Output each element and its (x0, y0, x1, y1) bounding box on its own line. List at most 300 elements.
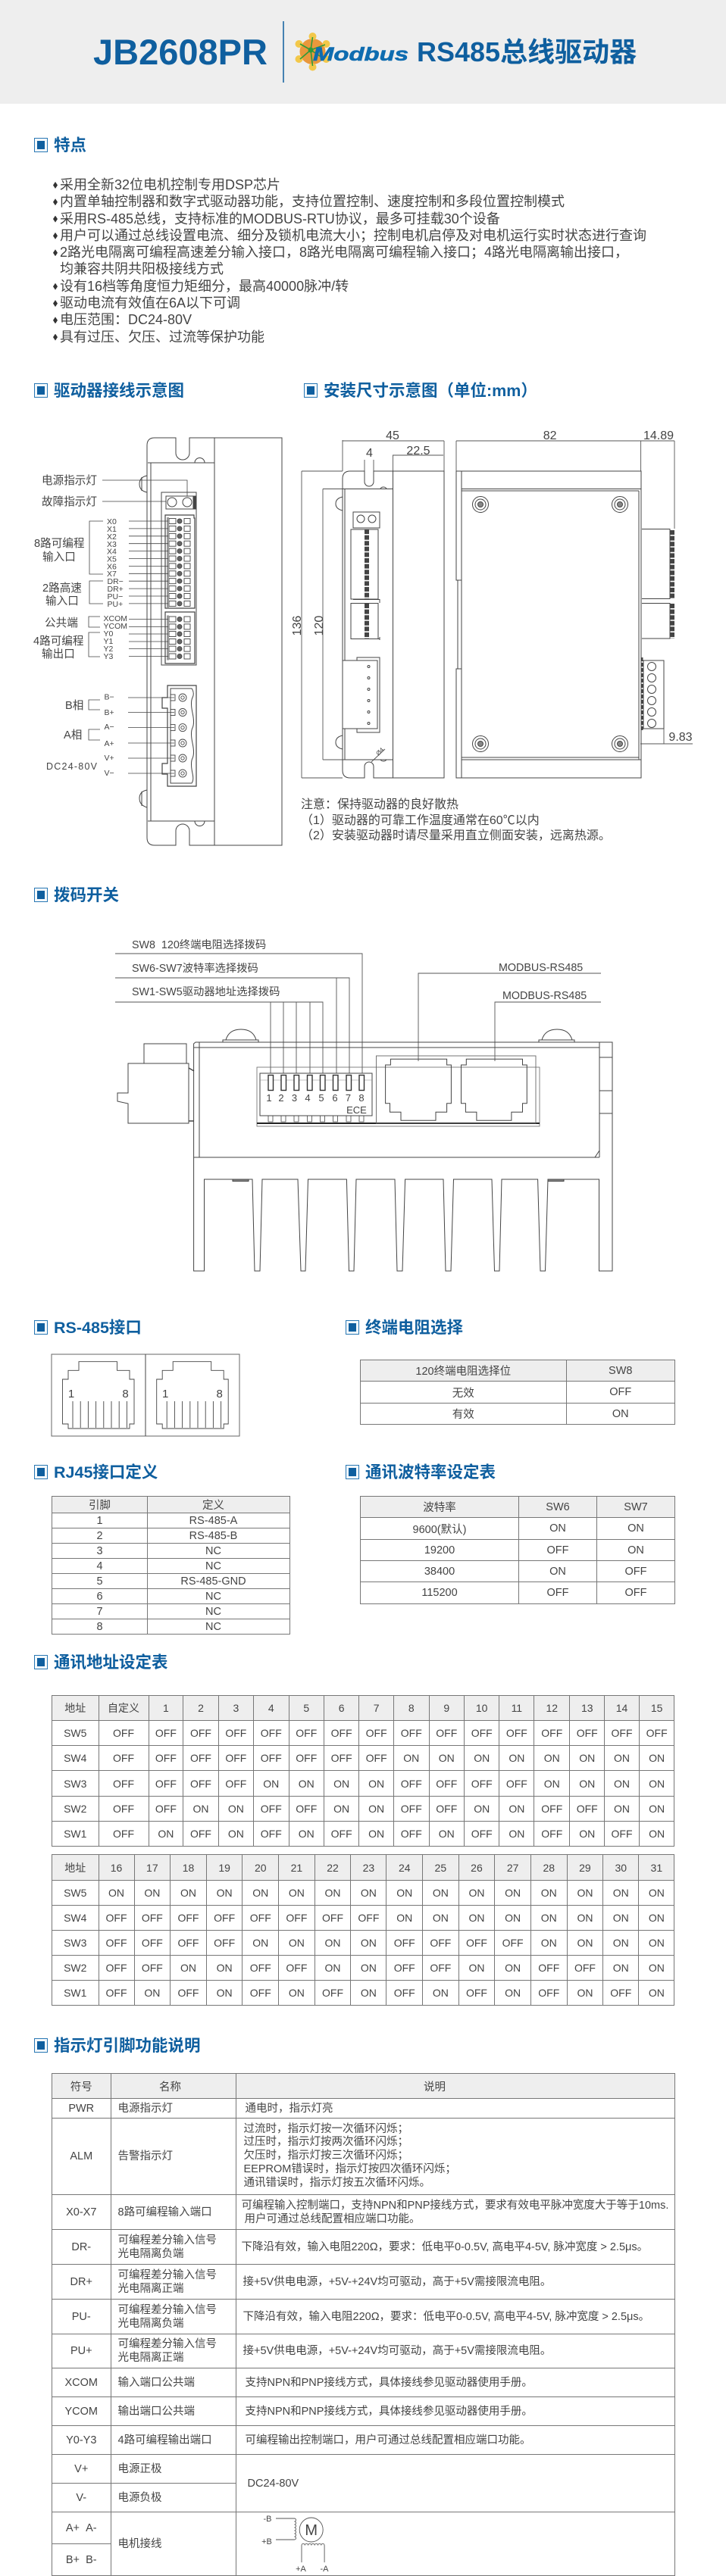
table: address 1-15: ON (403, 1752, 419, 1764)
table: indicator and pin functions: 下降沿有效，输入电阻220Ω，要求：低电平0-0.5V, 高电平4-5V, 脉冲宽度 > 2.5μs。 (241, 2240, 648, 2253)
table: address 16-31: OFF (250, 1912, 271, 1924)
right port (157, 1362, 228, 1429)
table: address 1-15: OFF (506, 1727, 527, 1739)
table: indicator and pin functions: 通电时，指示灯亮 (246, 2103, 333, 2115)
table: address 16-31: OFF (394, 1937, 415, 1949)
table: address 16-31: ON (325, 1937, 341, 1949)
table: address 16-31: ON (289, 1987, 305, 1999)
table: indicator and pin functions: 过流时，指示灯按一次循环闪烁； (244, 2123, 408, 2135)
table: indicator and pin functions: 支持NPN和PNP接线方式，具体接线参见驱动器使用手册。 (246, 2377, 533, 2389)
table: address 16-31: ON (541, 1937, 557, 1949)
table: address 1-15: OFF (113, 1727, 134, 1739)
wiring diagram (33, 438, 282, 845)
table: address 16-31: ON (613, 1887, 629, 1899)
table: address 1-15: OFF (225, 1777, 246, 1789)
table: indicator and pin functions: ALM (70, 2150, 92, 2162)
table: address 1-15: ON (614, 1777, 630, 1789)
table: indicator and pin functions: XCOM (65, 2377, 98, 2389)
table: address 16-31: OFF (538, 1962, 559, 1974)
table: baud rate: ON (549, 1565, 566, 1577)
table: address 1-15: OFF (155, 1727, 177, 1739)
table: address 1-15: ON (228, 1803, 244, 1815)
feature list: 驱动电流有效值在6A以下可调 (60, 295, 240, 311)
table: indicator and pin functions: PWR (68, 2103, 94, 2115)
table: address 1-15: ON (614, 1752, 630, 1764)
table: indicator and pin functions: 电机接线 (118, 2537, 162, 2549)
table: address 16-31: OFF (106, 1912, 127, 1924)
wiring group labels: 故障指示灯 (42, 495, 97, 508)
installation notes: （2）安装驱动器时请尽量采用直立侧面安装，远离热源。 (301, 829, 611, 842)
table: indicator and pin functions: V- (76, 2492, 86, 2504)
dimension values: 22.5 (406, 445, 430, 457)
heading: termination resistor: 终端电阻选择 (365, 1319, 463, 1337)
table: indicator and pin functions: X0-X7 (66, 2206, 96, 2218)
wiring group labels: 4路可编程 (33, 635, 84, 648)
dimension values: 45 (386, 429, 399, 442)
table: indicator and pin functions: 电源负极 (118, 2492, 162, 2504)
heading: features (34, 136, 86, 155)
table: address 16-31: 25 (435, 1862, 446, 1874)
table: address 1-15: ON (579, 1752, 595, 1764)
table: indicator and pin functions: B+ B- (66, 2554, 97, 2566)
table: address 1-15: OFF (155, 1752, 177, 1764)
table: address 16-31: OFF (142, 1937, 163, 1949)
table: RJ45 pins: 5 (96, 1575, 103, 1588)
table: baud rate: 波特率 (423, 1502, 456, 1514)
terminal pin labels: A− (105, 723, 114, 732)
table: indicator and pin functions: 可编程输出控制端口，用户可通过总线配置相应端口功能。 (246, 2434, 530, 2446)
table: address 16-31: OFF (214, 1912, 235, 1924)
table: address 1-15: ON (509, 1752, 524, 1764)
terminal pin labels: X2 (107, 532, 117, 542)
terminal pin labels: X6 (107, 562, 117, 571)
table: address 1-15: ON (368, 1777, 384, 1789)
table: address 1-15: ON (299, 1828, 314, 1840)
table: address 1-15: OFF (506, 1777, 527, 1789)
table: address 1-15: ON (579, 1828, 595, 1840)
table: indicator and pin functions: 光电隔离正端 (118, 2352, 183, 2364)
table: baud rate: SW7 (624, 1501, 648, 1513)
table: address 1-15: 15 (651, 1702, 662, 1714)
table: indicator and pin functions: PU+ (70, 2345, 92, 2357)
table: address 16-31: ON (505, 1987, 521, 1999)
table: address 16-31: SW3 (64, 1937, 86, 1949)
table: indicator and pin functions: 可编程输入控制端口，支持NPN和PNP接线方式，要求有效电平脉冲宽度大于等于10ms. (241, 2200, 668, 2212)
dimension values: 82 (543, 429, 557, 442)
table: address 16-31: ON (144, 1987, 160, 1999)
feature list: 电压范围：DC24-80V (60, 312, 192, 327)
table: address 1-15: ON (192, 1803, 208, 1815)
table: indicator and pin functions: 用户可通过总线配置相应端口功能。 (245, 2213, 421, 2225)
table: address 1-15: 1 (163, 1702, 169, 1714)
terminal pin labels: PU+ (108, 600, 123, 609)
table: baud rate (360, 1496, 675, 1604)
terminal pin labels: X3 (107, 540, 117, 549)
dimension values: 136 (291, 616, 304, 635)
table: RJ45 pins: RS-485-B (189, 1530, 237, 1542)
feature list: 采用RS-485总线，支持标准的MODBUS-RTU协议，最多可挂载30个设备 (60, 211, 500, 226)
heading: wiring diagram: 驱动器接线示意图 (54, 382, 184, 400)
table: address 1-15: OFF (296, 1727, 317, 1739)
table: baud rate: ON (627, 1522, 644, 1535)
table: address 16-31: OFF (430, 1937, 451, 1949)
feature list: 用户可以通过总线设置电流、细分及锁机电流大小；控制电机启停及对电机运行实时状态进行查询 (60, 228, 646, 243)
table: address 16-31: ON (217, 1962, 233, 1974)
table: address 1-15: OFF (401, 1803, 422, 1815)
right port: 8 (217, 1388, 223, 1400)
table: termination resistor: SW8 (609, 1365, 632, 1377)
table: address 1-15: OFF (577, 1727, 598, 1739)
table: indicator and pin functions: 说明 (424, 2081, 446, 2094)
table: address 16-31: 24 (399, 1862, 411, 1874)
table: address 16-31: OFF (394, 1987, 415, 1999)
RS-485 connector drawing (52, 1354, 239, 1436)
table: indicator and pin functions: 过压时，指示灯按两次循环闪烁； (244, 2136, 408, 2148)
table: address 16-31: OFF (322, 1987, 343, 1999)
table: address 1-15: 7 (374, 1702, 380, 1714)
installation notes: 注意：保持驱动器的良好散热 (301, 798, 458, 811)
table: indicator and pin functions: 可编程差分输入信号 (118, 2338, 217, 2350)
table: indicator and pin functions: 下降沿有效，输入电阻220Ω，要求：低电平0-0.5V, 高电平4-5V, 脉冲宽度 > 2.5μs。 (243, 2310, 649, 2322)
table: address 16-31: OFF (142, 1912, 163, 1924)
table: baud rate: OFF (624, 1587, 647, 1599)
table: address 1-15: OFF (331, 1727, 352, 1739)
table: address 1-15: 12 (546, 1702, 558, 1714)
table: address 16-31: 19 (218, 1862, 230, 1874)
dimension values (291, 429, 693, 757)
table: address 16-31: OFF (610, 1987, 631, 1999)
table: address 16-31: OFF (214, 1937, 235, 1949)
table: address 16-31: ON (217, 1987, 233, 1999)
table: address 16-31: 22 (327, 1862, 339, 1874)
table: RJ45 pins: NC (205, 1606, 221, 1618)
dimension values: 9.83 (668, 731, 693, 744)
table: address 16-31: ON (180, 1962, 196, 1974)
table: address 16-31: 26 (471, 1862, 483, 1874)
table: address 1-15: OFF (366, 1752, 387, 1764)
table: address 1-15: OFF (471, 1777, 493, 1789)
table: indicator and pin functions: 支持NPN和PNP接线方式，具体接线参见驱动器使用手册。 (246, 2406, 533, 2418)
table: RJ45 pins: 定义 (202, 1500, 224, 1512)
table: address 16-31: OFF (106, 1937, 127, 1949)
table: address 16-31: OFF (250, 1987, 271, 1999)
table: address 1-15: OFF (401, 1828, 422, 1840)
table: address 16-31: 28 (543, 1862, 555, 1874)
table: address 1-15: ON (263, 1777, 279, 1789)
terminal pin labels: V+ (105, 754, 114, 763)
table: indicator and pin functions: 8路可编程输入端口 (118, 2206, 212, 2218)
table: address 16-31: OFF (538, 1987, 559, 1999)
table: address 1-15: SW2 (64, 1803, 86, 1815)
table: indicator and pin functions: DR+ (70, 2275, 92, 2287)
table: address 16-31: ON (433, 1887, 449, 1899)
DIP switch block (257, 1067, 540, 1126)
terminal pin labels: X0 (107, 517, 117, 526)
table: baud rate: ON (549, 1522, 566, 1535)
table: address 1-15: ON (228, 1828, 244, 1840)
table: address 16-31: OFF (286, 1962, 307, 1974)
terminal pin labels: DR+ (108, 585, 124, 594)
table: address 16-31: ON (577, 1937, 593, 1949)
table: address 16-31: 20 (255, 1862, 267, 1874)
wiring group labels: 电源指示灯 (42, 474, 97, 487)
icon: stepper motor wiring: -B (264, 2515, 271, 2524)
table: indicator and pin functions: V+ (74, 2463, 88, 2475)
side view (456, 471, 672, 778)
feature list: 采用全新32位电机控制专用DSP芯片 (60, 177, 280, 192)
modbus RJ ports (376, 1056, 536, 1123)
heading: RJ45 definition: RJ45接口定义 (54, 1463, 158, 1482)
table: address 1-15: ON (368, 1803, 384, 1815)
table: address 1-15: OFF (113, 1803, 134, 1815)
table: indicator and pin functions: 光电隔离正端 (118, 2283, 183, 2295)
table: address 16-31: ON (433, 1912, 449, 1924)
terminal pin labels: X1 (107, 525, 117, 534)
table: address 1-15: ON (439, 1752, 455, 1764)
installation dimension drawings (291, 429, 693, 779)
terminal pin labels: B+ (105, 708, 114, 717)
table: address 1-15: OFF (296, 1803, 317, 1815)
table: address 1-15: 4 (268, 1702, 274, 1714)
table: address 16-31: ON (252, 1937, 268, 1949)
terminal pin labels: B− (105, 692, 114, 701)
table: address 1-15: ON (544, 1752, 560, 1764)
installation notes (301, 798, 611, 842)
switch numbers: ECE (346, 1104, 367, 1116)
side connector (117, 1044, 194, 1123)
table: address 16-31: ON (649, 1987, 665, 1999)
wiring group labels: 输入口 (45, 595, 79, 607)
table: address 16-31: OFF (502, 1937, 524, 1949)
DIP switch diagram (115, 938, 612, 1271)
table: address 16-31: SW4 (64, 1912, 86, 1924)
table: address 1-15: OFF (190, 1727, 211, 1739)
table: address 1-15: OFF (401, 1727, 422, 1739)
table: indicator and pin functions: 符号 (70, 2081, 92, 2094)
dimension values: 4 (366, 447, 373, 460)
table: address 1-15: OFF (296, 1752, 317, 1764)
table: indicator and pin functions: 告警指示灯 (118, 2150, 173, 2162)
table: address 16-31: ON (577, 1987, 593, 1999)
table: address 1-15: OFF (646, 1727, 668, 1739)
wiring group labels: 公共端 (45, 617, 78, 629)
table: address 16-31: ON (649, 1962, 665, 1974)
table: address 1-15: OFF (113, 1777, 134, 1789)
table: address 1-15: 自定义 (108, 1702, 139, 1714)
table: address 16-31: SW1 (64, 1987, 86, 1999)
table: address 16-31: OFF (394, 1962, 415, 1974)
table: address 16-31: 21 (291, 1862, 302, 1874)
table: address 1-15: OFF (612, 1727, 633, 1739)
table: address 16-31: 16 (111, 1862, 122, 1874)
installation notes: （1）驱动器的可靠工作温度通常在60℃以内 (301, 813, 540, 827)
table: address 1-15: ON (614, 1803, 630, 1815)
table: termination resistor: ON (612, 1407, 629, 1419)
table: RJ45 pins: 8 (96, 1621, 103, 1633)
table: address 16-31: ON (613, 1962, 629, 1974)
table: address 16-31: ON (505, 1912, 521, 1924)
table: address 16-31: OFF (574, 1962, 596, 1974)
leader labels: MODBUS-RS485 (502, 990, 587, 1002)
table: address 1-15: OFF (113, 1828, 134, 1840)
table: baud rate: OFF (547, 1544, 568, 1556)
table: indicator and pin functions: DC24-80V (247, 2477, 299, 2489)
wiring group labels: 输入口 (42, 551, 76, 564)
table: address 16-31: ON (361, 1887, 377, 1899)
table: RJ45 pins: 1 (96, 1515, 103, 1527)
table: RJ45 pins: 4 (96, 1560, 103, 1572)
table: address 1-15: OFF (612, 1828, 633, 1840)
table: RJ45 pins: RS-485-GND (180, 1575, 246, 1588)
table: address 1-15: ON (474, 1803, 490, 1815)
table: RJ45 pins: 6 (96, 1591, 103, 1603)
product subtitle: RS485总线驱动器 (417, 36, 637, 67)
table: address 1-15: OFF (155, 1777, 177, 1789)
table: address 16-31: OFF (466, 1987, 487, 1999)
table: address 16-31: ON (289, 1887, 305, 1899)
wiring group labels: B相 (65, 699, 83, 712)
table: address 16-31: OFF (106, 1987, 127, 1999)
table: termination resistor: 有效 (452, 1409, 474, 1421)
wiring group labels: A相 (64, 729, 82, 742)
table: address 16-31: ON (361, 1962, 377, 1974)
table: address 16-31: ON (577, 1912, 593, 1924)
table: address 16-31: OFF (430, 1962, 451, 1974)
feature list: 均兼容共阴共阳极接线方式 (60, 261, 224, 276)
feature list: 2路光电隔离可编程高速差分输入接口，8路光电隔离可编程输入接口；4路光电隔离输出接口， (60, 245, 628, 260)
terminal pin labels: PU− (108, 592, 123, 601)
table: address 1-15: OFF (331, 1752, 352, 1764)
table: address 1-15: OFF (261, 1828, 282, 1840)
switch numbers: 8 (358, 1092, 365, 1104)
dimension lines (302, 440, 693, 778)
table: address 1-15: SW1 (64, 1828, 86, 1840)
icon: stepper motor wiring (261, 2515, 329, 2574)
table: address 16-31: SW5 (64, 1887, 86, 1899)
icon: stepper motor wiring: +B (261, 2537, 272, 2546)
terminal pin labels: X4 (107, 547, 117, 556)
heading: address table: 通讯地址设定表 (54, 1653, 168, 1672)
wiring group labels: 8路可编程 (34, 537, 85, 550)
table: address 16-31: OFF (250, 1962, 271, 1974)
table: address 1-15: OFF (155, 1803, 177, 1815)
table: address 16-31: ON (108, 1887, 124, 1899)
table: RJ45 pins: 引脚 (89, 1500, 111, 1512)
heading: installation dimensions: 安装尺寸示意图（单位:mm） (324, 382, 537, 400)
dimension values: 120 (313, 616, 326, 635)
screws (223, 1029, 574, 1042)
table: address 1-15: 3 (233, 1702, 239, 1714)
table: address 1-15: ON (544, 1777, 560, 1789)
table: address 1-15: OFF (471, 1727, 493, 1739)
table: address 1-15: OFF (436, 1727, 457, 1739)
table: address 1-15: OFF (577, 1803, 598, 1815)
icon: stepper motor wiring: M (305, 2522, 318, 2539)
switch numbers: 6 (332, 1092, 338, 1104)
table: address 1-15: OFF (401, 1777, 422, 1789)
switch numbers: 4 (305, 1092, 311, 1104)
table: indicator and pin functions: 4路可编程输出端口 (118, 2434, 212, 2446)
table: address 16-31: ON (433, 1987, 449, 1999)
table: address 16-31: OFF (177, 1987, 199, 1999)
table: address 16-31: ON (468, 1887, 484, 1899)
switch numbers: 5 (318, 1092, 324, 1104)
table: address 1-15: 13 (581, 1702, 593, 1714)
table: address 16-31: ON (361, 1987, 377, 1999)
table: address 16-31: OFF (106, 1962, 127, 1974)
table: indicator and pin functions (52, 2073, 675, 2576)
leader labels: SW1-SW5驱动器地址选择拨码 (132, 985, 280, 998)
table: address 1-15: OFF (331, 1828, 352, 1840)
table: indicator and pin functions: DR- (71, 2240, 91, 2253)
power and motor connector (162, 685, 196, 786)
table: address 16-31: 17 (146, 1862, 158, 1874)
table: address 1-15: OFF (190, 1752, 211, 1764)
table: termination resistor: OFF (609, 1386, 631, 1398)
table: address 16-31: ON (649, 1937, 665, 1949)
table: termination resistor (360, 1360, 675, 1425)
table: indicator and pin functions: 可编程差分输入信号 (118, 2304, 217, 2316)
table: address 16-31: OFF (142, 1962, 163, 1974)
switch numbers: 2 (278, 1092, 284, 1104)
heading: baud rate: 通讯波特率设定表 (365, 1463, 496, 1482)
table: address 16-31: ON (361, 1937, 377, 1949)
table: address 16-31: ON (541, 1887, 557, 1899)
indicator LED box (161, 492, 196, 665)
table: address 16-31: ON (613, 1912, 629, 1924)
front view (336, 471, 444, 778)
heading: RS-485 port: RS-485接口 (54, 1319, 142, 1337)
icon: modbus logo: Modbus (313, 44, 408, 65)
table: RJ45 pins: NC (205, 1591, 221, 1603)
table: address 16-31: ON (325, 1962, 341, 1974)
model title: JB2608PR (93, 32, 268, 72)
table: address 16-31: ON (325, 1887, 341, 1899)
table: indicator and pin functions: 电源正极 (118, 2463, 162, 2475)
icon: stepper motor wiring: -A (320, 2565, 329, 2574)
table: address 1-15: OFF (225, 1727, 246, 1739)
table: indicator and pin functions: YCOM (65, 2406, 98, 2418)
table: address 1-15: 9 (443, 1702, 449, 1714)
table: address 16-31: ON (505, 1962, 521, 1974)
table: address 16-31: 29 (579, 1862, 591, 1874)
table: address 16-31: ON (252, 1887, 268, 1899)
heading: indicator and pin functions: 指示灯引脚功能说明 (54, 2037, 201, 2055)
table: address 1-15: 6 (339, 1702, 345, 1714)
terminal pin labels: V− (105, 769, 114, 778)
table: address 1-15: 地址 (64, 1702, 86, 1714)
feature list: 设有16档等角度恒力矩细分，最高40000脉冲/转 (60, 279, 349, 294)
table: address 16-31: ON (289, 1937, 305, 1949)
terminal pin labels: XCOM (103, 614, 127, 623)
table: address 16-31: OFF (286, 1912, 307, 1924)
table: address 16-31: ON (180, 1887, 196, 1899)
feature list: 具有过压、欠压、过流等保护功能 (60, 329, 264, 345)
terminal pin labels: X5 (107, 554, 117, 564)
table: address 1-15: OFF (471, 1828, 493, 1840)
table: baud rate: OFF (624, 1565, 647, 1577)
left port (62, 1362, 134, 1429)
table: RJ45 pins: RS-485-A (189, 1515, 237, 1527)
terminal pin labels (103, 517, 127, 778)
table: baud rate: SW6 (546, 1501, 570, 1513)
table: indicator and pin functions: 可编程差分输入信号 (118, 2269, 217, 2281)
table: address 1-15: OFF (261, 1727, 282, 1739)
table: indicator and pin functions: Y0-Y3 (66, 2434, 96, 2446)
wiring group labels: DC24-80V (46, 761, 98, 772)
switch numbers: 7 (346, 1092, 351, 1104)
feature list: 内置单轴控制器和数字式驱动器功能，支持位置控制、速度控制和多段位置控制模式 (60, 194, 565, 209)
